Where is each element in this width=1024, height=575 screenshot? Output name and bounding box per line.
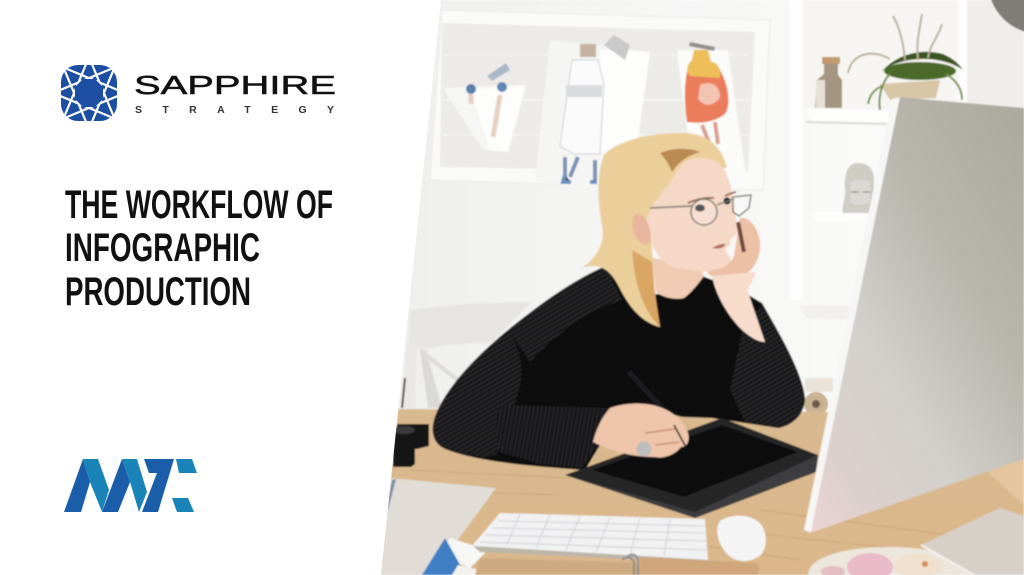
mouse [717, 516, 766, 561]
left paper stack [381, 478, 496, 575]
logo: MWT [64, 459, 197, 512]
small items behind desk [804, 378, 833, 416]
buddha figurine [843, 163, 874, 213]
monitor [804, 97, 1024, 533]
white panel [0, 0, 441, 575]
right sleeve [730, 303, 805, 428]
potted plant [848, 14, 963, 110]
pinboard frame [430, 10, 770, 190]
sweater left sleeve [433, 330, 521, 457]
hair [582, 133, 727, 327]
title: INFOGRAPHIC [65, 226, 260, 270]
title: THE WORKFLOW OF [65, 183, 333, 227]
photo: designer at desk [370, 0, 1024, 575]
wordmark: SAPPHIRE [134, 70, 336, 100]
glasses [650, 195, 751, 225]
jar on shelf [815, 57, 842, 108]
title: PRODUCTION [65, 270, 251, 314]
monitor stand [921, 508, 1024, 575]
logo: Sapphire Strategy [61, 65, 335, 121]
icon: sapphire gem [61, 65, 117, 121]
sweater body [433, 266, 805, 470]
black lens cups on desk [393, 424, 429, 467]
desk [380, 409, 1024, 575]
wall clock disc [988, 0, 1024, 34]
right shelves [800, 108, 888, 320]
title [65, 183, 333, 314]
neck [652, 258, 704, 299]
dish with macarons [808, 547, 978, 575]
keyboard [472, 513, 708, 563]
eyes and mouth [688, 192, 736, 248]
sketch: coat figure [535, 35, 650, 190]
drawing hand [593, 404, 689, 458]
notebook with spiral [475, 555, 760, 575]
face [646, 158, 738, 272]
wall background [370, 0, 1024, 420]
tablet [565, 418, 818, 518]
chair [402, 302, 532, 408]
tagline: STRATEGY [135, 104, 334, 116]
hand on cheek [708, 218, 760, 276]
sketch: red dress [677, 42, 748, 190]
sketch: small figures [443, 63, 526, 152]
forearm [712, 272, 765, 342]
stylus [629, 372, 662, 408]
ear [632, 214, 651, 245]
